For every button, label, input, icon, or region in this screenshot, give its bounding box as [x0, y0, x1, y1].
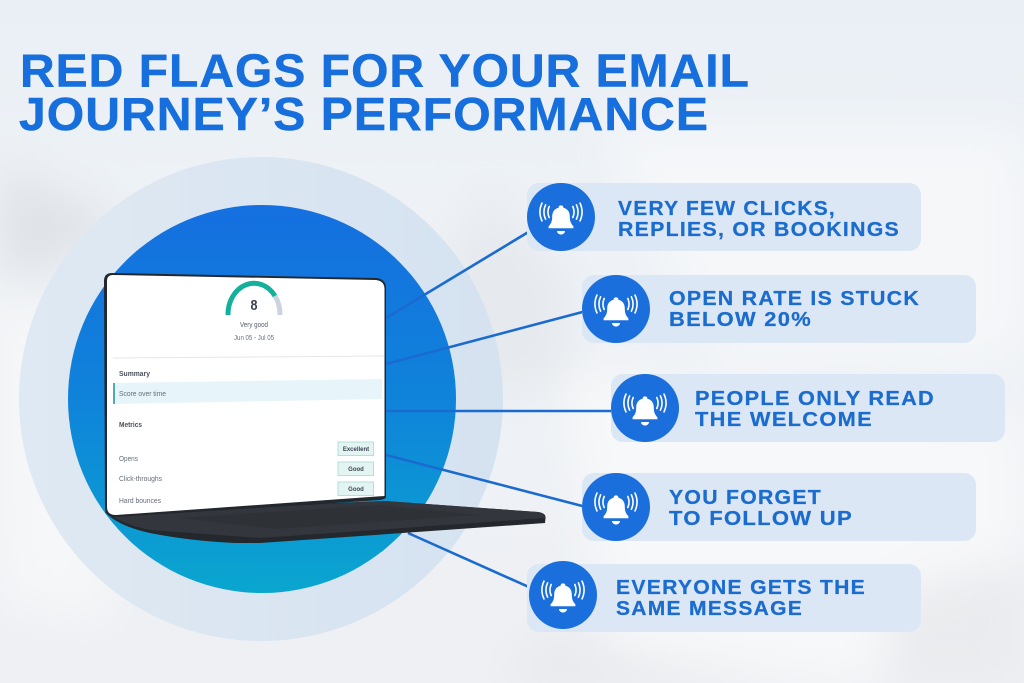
title — [19, 44, 750, 140]
metric badges: Good — [348, 467, 364, 473]
summary row — [114, 369, 382, 404]
score text: Jun 05 - Jul 05 — [234, 335, 274, 342]
flag 5 — [527, 561, 921, 632]
flag 2 — [582, 275, 976, 343]
metrics labels: Opens — [119, 454, 138, 463]
metric badges: Good — [348, 487, 364, 493]
flag 1: VERY FEW CLICKS, — [618, 198, 836, 220]
laptop base — [105, 501, 546, 543]
flag 3: PEOPLE ONLY READ — [695, 388, 935, 410]
keyboard keys — [180, 505, 480, 529]
score gauge — [228, 283, 280, 315]
flag 2: OPEN RATE IS STUCK — [669, 288, 920, 310]
flag 2: BELOW 20% — [669, 309, 812, 331]
summary row: Score over time — [119, 389, 166, 398]
flag 5: SAME MESSAGE — [616, 598, 803, 620]
metric badges: Excellent — [343, 447, 369, 453]
flag 1: REPLIES, OR BOOKINGS — [618, 219, 900, 241]
connector lines — [386, 225, 620, 592]
laptop screen — [107, 275, 384, 515]
metrics labels: Metrics — [119, 420, 142, 429]
laptop — [104, 273, 546, 543]
flag 4: TO FOLLOW UP — [669, 508, 853, 530]
score text: 8 — [250, 297, 258, 314]
flag 1 — [527, 183, 921, 251]
outer pale circle — [19, 157, 503, 641]
flag 4 — [582, 473, 976, 541]
laptop keyboard deck — [110, 501, 545, 538]
title: RED FLAGS FOR YOUR EMAIL — [20, 44, 750, 96]
metric badges — [338, 442, 374, 496]
laptop screen bezel — [104, 273, 386, 517]
score text — [234, 297, 274, 342]
title: JOURNEY’S PERFORMANCE — [19, 88, 709, 140]
flag 4: YOU FORGET — [669, 487, 822, 509]
metrics labels: Click-throughs — [119, 474, 162, 483]
inner blue circle — [68, 205, 456, 593]
metrics labels: Hard bounces — [119, 496, 161, 505]
summary row: Summary — [119, 369, 151, 378]
divider — [113, 356, 384, 358]
score text: Very good — [240, 320, 268, 329]
metrics labels — [119, 420, 162, 505]
flag 3 — [611, 374, 1005, 442]
flag 5: EVERYONE GETS THE — [616, 577, 866, 599]
flag 3: THE WELCOME — [695, 409, 873, 431]
